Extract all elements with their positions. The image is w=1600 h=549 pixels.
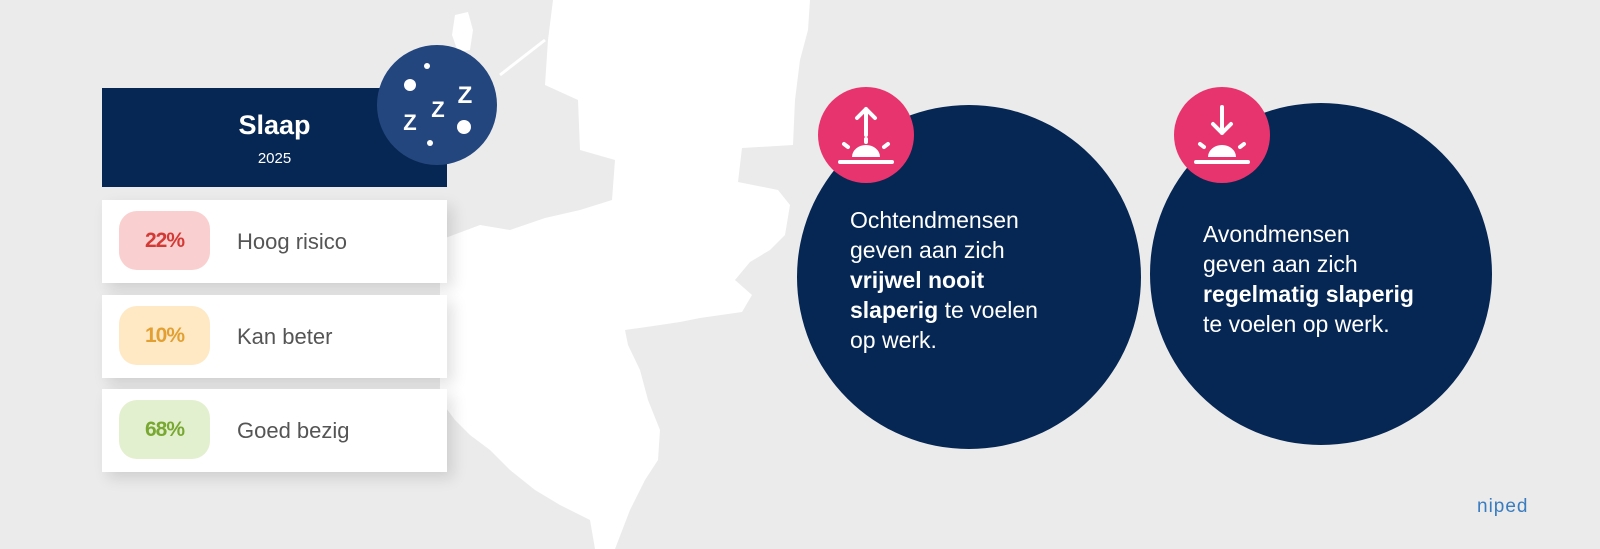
circle: avondmensen: Avondmensen — [1203, 221, 1350, 247]
icon: zzz: Z — [431, 97, 445, 122]
circle: ochtendmensen: slaperig te voelen — [850, 297, 1038, 323]
year: 2025 — [258, 150, 291, 167]
icon: zzz — [377, 45, 497, 165]
row: goed bezig: 68% — [145, 418, 184, 441]
row: kan beter — [102, 295, 447, 378]
circle: ochtendmensen: geven aan zich — [850, 237, 1005, 263]
circle: avondmensen: geven aan zich — [1203, 251, 1358, 277]
row: kan beter: 10% — [145, 324, 184, 347]
row: kan beter: Kan beter — [237, 324, 332, 349]
circle: avondmensen — [1150, 103, 1492, 445]
circle: ochtendmensen — [797, 105, 1141, 449]
icon: sunset down — [1174, 87, 1270, 183]
card header — [102, 88, 447, 187]
row: hoog risico: 22% — [145, 229, 184, 252]
circle: avondmensen: regelmatig slaperig — [1203, 281, 1414, 307]
icon: zzz: Z — [458, 82, 472, 109]
circle: ochtendmensen: vrijwel nooit — [850, 267, 984, 293]
row: hoog risico — [102, 200, 447, 283]
logo: niped: niped — [1477, 496, 1528, 517]
heading: Slaap — [238, 110, 311, 140]
circle: ochtendmensen: Ochtendmensen — [850, 207, 1019, 233]
circle: avondmensen: te voelen op werk. — [1203, 311, 1390, 337]
row: goed bezig — [102, 389, 447, 472]
circle: ochtendmensen: op werk. — [850, 327, 937, 353]
row: hoog risico: Hoog risico — [237, 229, 347, 254]
row: goed bezig: Goed bezig — [237, 418, 350, 443]
icon: sunrise up — [818, 87, 914, 183]
icon: zzz: Z — [403, 110, 417, 135]
